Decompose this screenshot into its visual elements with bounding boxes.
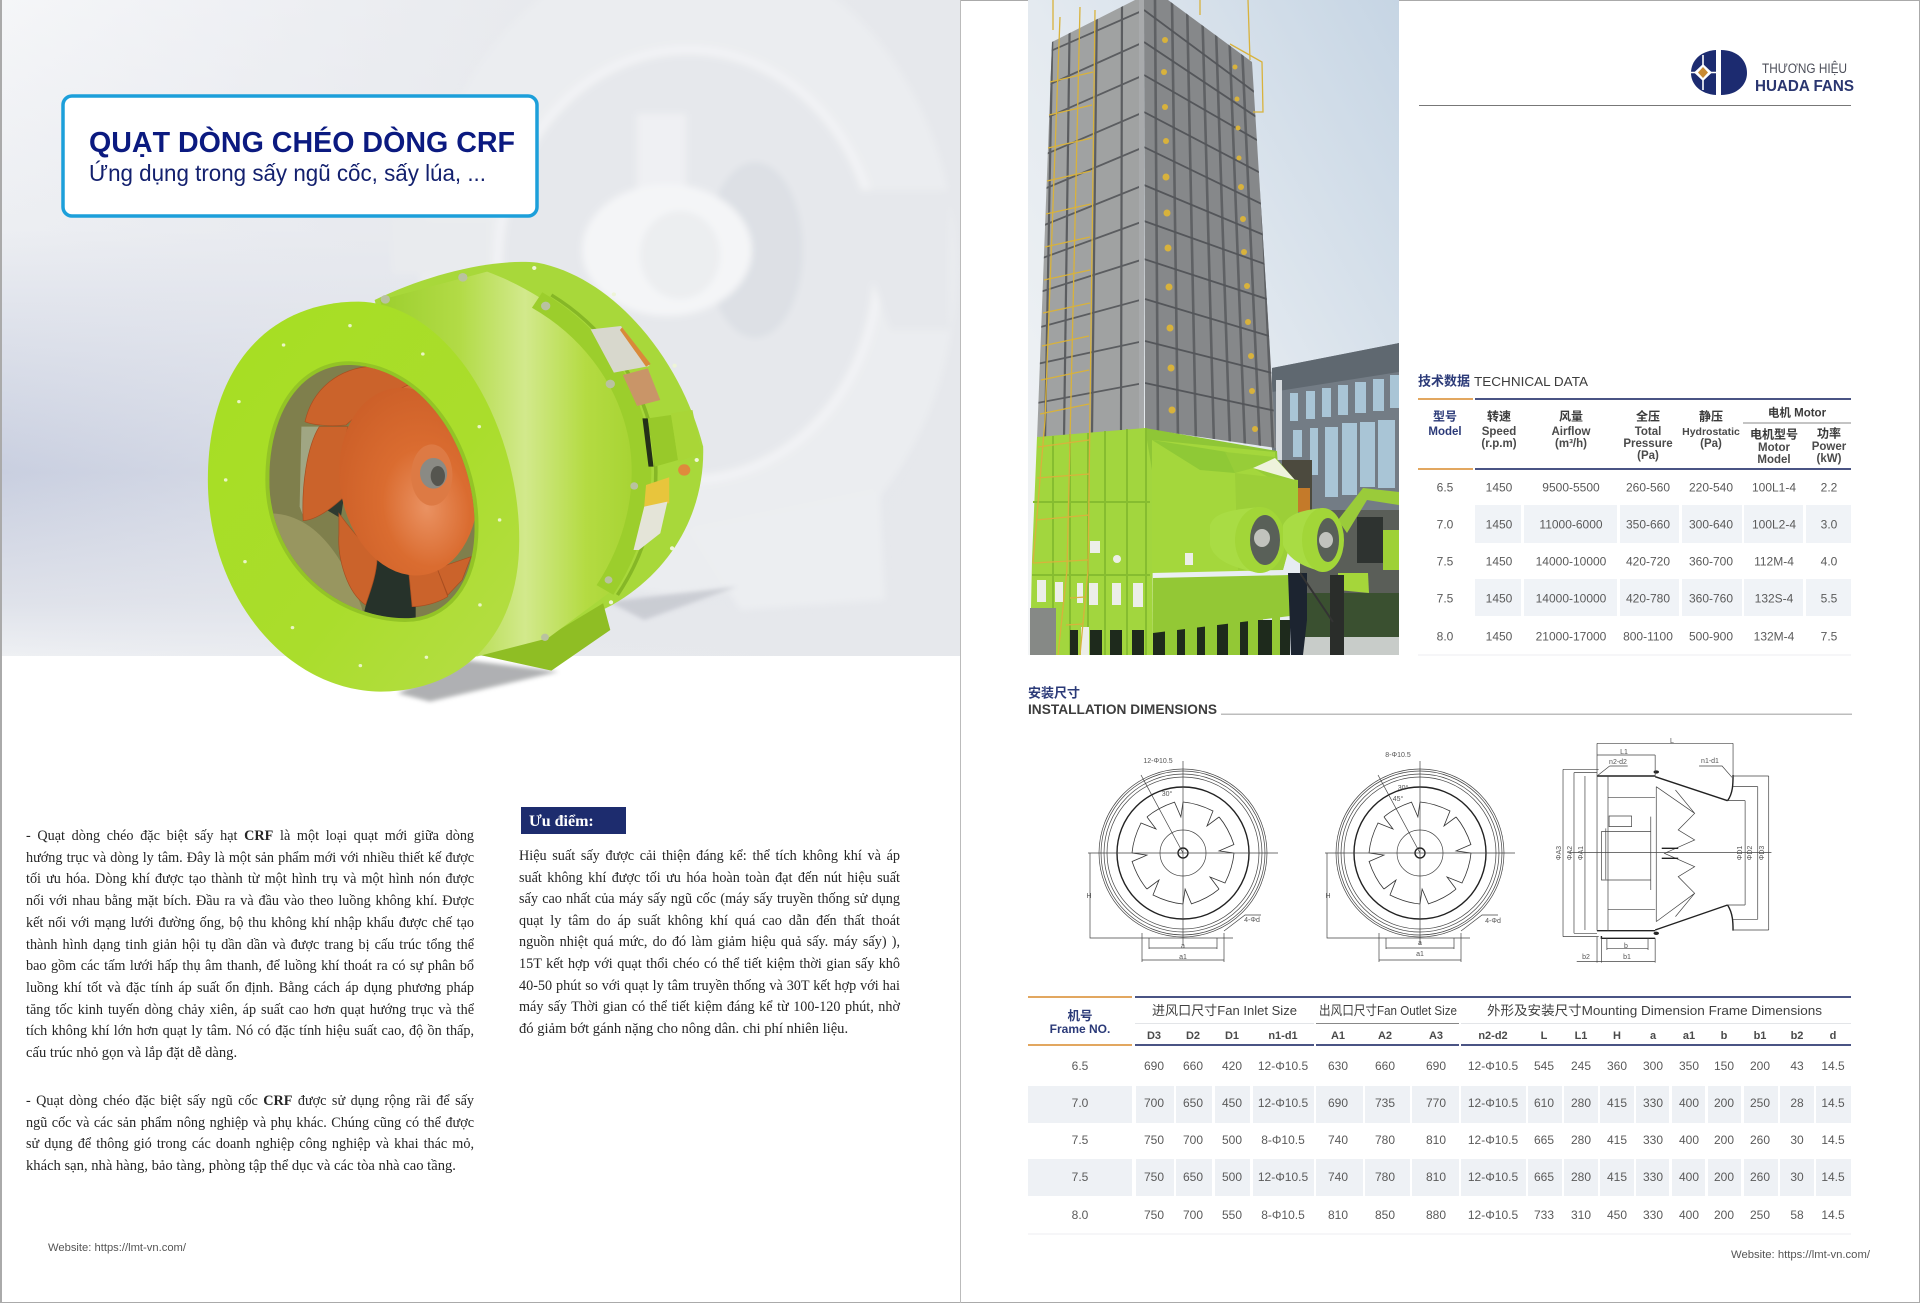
table rows: 200 (1750, 1059, 1770, 1073)
table rows: 100L2-4 (1752, 518, 1796, 532)
text block: advantages: nguồn nhiệt quá mức, do đó làm giảm hiệu quả sấy. máy sấy) ), (519, 934, 900, 950)
text block: product description: cấu trúc nhỏ gọn và lắp đặt dễ dàng. (26, 1045, 237, 1061)
diagram: outlet front view: 4-Φd (1485, 918, 1501, 925)
table header: Total (1635, 426, 1661, 438)
table header: n1-d1 (1268, 1030, 1298, 1042)
table rows: 3.0 (1821, 518, 1838, 532)
table rows: 400 (1679, 1208, 1699, 1222)
table rows: 9500-5500 (1542, 480, 1600, 494)
diagram: inlet front view: H (1086, 893, 1092, 900)
table header: 风量 (1559, 410, 1583, 424)
table rows: 770 (1426, 1096, 1446, 1110)
diagram: inlet front view: a1 (1179, 954, 1187, 961)
table rows: 300 (1643, 1059, 1663, 1073)
table header: 外形及安装尺寸Mounting Dimension Frame Dimensions (1487, 1003, 1823, 1018)
table rows: 6.5 (1072, 1059, 1089, 1073)
table rows: 7.0 (1072, 1096, 1089, 1110)
text block: advantages: máy sấy Thời gian có thể tiết kiệm đáng kể từ 100-120 phút, nhờ (519, 999, 900, 1015)
table rows: 660 (1375, 1059, 1395, 1073)
table rows: 14000-10000 (1536, 592, 1607, 606)
ghosted fan backdrop (494, 48, 878, 490)
logo: Huada Fans brand: HUADA FANS (1755, 78, 1854, 95)
table rows: 5.5 (1821, 592, 1838, 606)
table rows: 350-660 (1626, 518, 1670, 532)
table header: 功率 (1817, 426, 1841, 440)
diagram: side view: ΦD1 (1737, 846, 1744, 860)
diagram: outlet front view: a (1418, 940, 1422, 947)
table rows: 14.5 (1821, 1170, 1845, 1184)
table rows: 250 (1750, 1096, 1770, 1110)
text block: product description: nối với nhau bằng mặt bích. Đầu ra và đầu vào theo luồng không khí. Được (26, 893, 474, 909)
table header: Speed (1482, 426, 1516, 438)
table header: D2 (1186, 1030, 1200, 1042)
table header: A2 (1378, 1030, 1392, 1042)
table rows: 310 (1571, 1208, 1591, 1222)
diagram: inlet front view: 30° (1162, 790, 1172, 798)
text block: product description: - Quạt dòng chéo đặc biệt sấy hạt CRF là một loại quạt mới giữa dòng (26, 828, 474, 844)
table rows: 220-540 (1689, 480, 1733, 494)
table header: (Pa) (1637, 450, 1659, 462)
table header: 型号 (1433, 410, 1457, 424)
text block: product applications: sử dụng để thông gió trong các doanh nghiệp công nghiệp và khai thác mỏ, (26, 1136, 474, 1152)
table rows: 132M-4 (1754, 630, 1795, 644)
table rows: 1450 (1486, 592, 1513, 606)
table rows: 30 (1790, 1133, 1804, 1147)
table header (1050, 1003, 1836, 1042)
table rows: 100L1-4 (1752, 480, 1796, 494)
table header: n2-d2 (1478, 1030, 1508, 1042)
text block: product description: kết nối với mạng lưới đường ống, bộ thu không khí nhập khẩu được chế tạo (26, 915, 474, 931)
table rows: 500 (1222, 1170, 1242, 1184)
table header: Hydrostatic (1682, 426, 1740, 438)
table rows: 200 (1714, 1096, 1734, 1110)
diagram: side view: L1 (1620, 749, 1628, 756)
table rows: 200 (1714, 1170, 1734, 1184)
table rows: 6.5 (1437, 480, 1454, 494)
table rows: 400 (1679, 1096, 1699, 1110)
table header: 转速 (1487, 408, 1511, 424)
table rows: 780 (1375, 1133, 1395, 1147)
table rows: 690 (1144, 1059, 1164, 1073)
diagram: inlet front view: a (1181, 943, 1185, 950)
table rows: 550 (1222, 1208, 1242, 1222)
text block: product description: tăng tốc kinh tuyến dòng chảy xiên, áp suất cao hơn quạt hướng trục và thể (26, 1002, 474, 1018)
table rows: 8-Φ10.5 (1261, 1208, 1305, 1222)
hopper (1152, 440, 1298, 573)
table header: L (1541, 1030, 1548, 1042)
table rows: 12-Φ10.5 (1468, 1170, 1518, 1184)
bolts (381, 273, 638, 641)
tower right face (1140, 0, 1280, 450)
table rows (1072, 1059, 1845, 1222)
table rows: 14000-10000 (1536, 554, 1607, 568)
table header: Model (1428, 426, 1462, 438)
table rows: 280 (1571, 1133, 1591, 1147)
diagram: side view: ΦA2 (1567, 846, 1574, 860)
table rows: 12-Φ10.5 (1468, 1208, 1518, 1222)
table rows: 14.5 (1821, 1133, 1845, 1147)
text block: product description (26, 828, 474, 1061)
table header: Motor (1758, 442, 1790, 454)
table rows: 665 (1534, 1133, 1554, 1147)
photo: grain dryer tower (1028, 0, 1399, 655)
table header: 全压 (1636, 408, 1660, 424)
diagram: outlet front view: 30° (1398, 784, 1408, 792)
table rows: 7.5 (1072, 1133, 1089, 1147)
green base (1030, 428, 1153, 655)
table rows: 700 (1183, 1208, 1203, 1222)
heading: advantages: Ưu điểm: (529, 813, 594, 830)
table rows: 750 (1144, 1208, 1164, 1222)
table rows: 450 (1222, 1096, 1242, 1110)
table header: b (1721, 1030, 1728, 1042)
website link: left page: Website: https://lmt-vn.com/ (48, 1242, 187, 1254)
table rows: 14.5 (1821, 1096, 1845, 1110)
diagram: side view: n2-d2 (1609, 759, 1627, 766)
table header: 出风口尺寸Fan Outlet Size (1319, 1003, 1457, 1018)
logo: Huada Fans brand (1691, 50, 1854, 95)
diagram: outlet front view: a1 (1416, 951, 1424, 958)
tower left face (1037, 0, 1144, 437)
heading: installation dimensions: INSTALLATION DIMENSIONS (1028, 702, 1217, 717)
table header: 电机型号 (1750, 426, 1798, 442)
table rows (1437, 480, 1838, 644)
text block: product description: bao gồm các tấm lưới hấp thụ âm thanh, để luồng khí thoát ra có sự phân bổ (26, 958, 474, 974)
diagram: outlet front view: H (1325, 893, 1331, 900)
table rows: 420-780 (1626, 592, 1670, 606)
text block: product description: luồng khí tốt và đặc tính áp suất ổn định. Bằng cách áp dụng phương pháp (26, 980, 474, 996)
table header: A3 (1429, 1030, 1443, 1042)
table rows: 7.5 (1821, 630, 1838, 644)
table rows: 810 (1328, 1208, 1348, 1222)
table rows: 330 (1643, 1208, 1663, 1222)
table rows: 245 (1571, 1059, 1591, 1073)
table rows: 28 (1790, 1096, 1804, 1110)
data labels (591, 326, 701, 550)
table header: (m³/h) (1555, 438, 1587, 450)
impeller disc (342, 388, 474, 576)
table rows: 665 (1534, 1170, 1554, 1184)
table rows: 415 (1607, 1133, 1627, 1147)
text block: product description: tích không khí lớn hơn quạt ly tâm. Nó có đặc tính hiệu suất cao, độ ồn thấp, (26, 1023, 474, 1039)
table rows: 7.5 (1437, 554, 1454, 568)
table header: H (1613, 1030, 1621, 1042)
table header: A1 (1331, 1030, 1345, 1042)
table header: (r.p.m) (1481, 438, 1517, 450)
text block: advantages: 15T kết hợp với quạt thổi chéo có thể tiết kiệm thời gian sấy khô (519, 956, 900, 972)
front flange (208, 302, 519, 692)
table header: 机号 (1067, 1008, 1093, 1023)
table rows: 280 (1571, 1096, 1591, 1110)
table rows: 330 (1643, 1096, 1663, 1110)
fan foot (480, 603, 610, 671)
harvester and hedge (1282, 460, 1399, 655)
table rows: 330 (1643, 1133, 1663, 1147)
fan body (380, 272, 644, 657)
table: technical data (1418, 398, 1851, 656)
text block: advantages: sấy cao nhất của máy sấy ngũ cốc (máy sấy truyền thống sử dụng (519, 891, 900, 907)
table rows: 150 (1714, 1059, 1734, 1073)
table rows: 12-Φ10.5 (1258, 1059, 1308, 1073)
table header: b1 (1754, 1030, 1766, 1042)
table rows: 420 (1222, 1059, 1242, 1073)
diagram: outlet front view: 45° (1393, 795, 1403, 803)
table rows: 700 (1183, 1133, 1203, 1147)
diagram: side view (1556, 738, 1771, 963)
table rows: 112M-4 (1754, 554, 1794, 568)
heading: advantages (521, 807, 626, 834)
table rows: 750 (1144, 1170, 1164, 1184)
table rows: 810 (1426, 1170, 1446, 1184)
table header: a (1650, 1030, 1657, 1042)
table rows: 14.5 (1821, 1059, 1845, 1073)
heading: technical data: 技术数据 (1418, 374, 1470, 388)
text block: product description: hướng trục và dòng ly tâm. Đây là một sản phẩm mới với nhiều thiết kế được (26, 850, 474, 866)
diagram: side view: ΦD3 (1759, 846, 1766, 860)
table rows: 780 (1375, 1170, 1395, 1184)
table header: Power (1812, 441, 1847, 453)
icon: logo mark (1691, 50, 1747, 95)
table rows: 330 (1643, 1170, 1663, 1184)
text block: product applications (26, 1093, 474, 1174)
text block: advantages: đó giảm bớt gánh nặng cho nông dân. chi phí nhiên liệu. (519, 1021, 848, 1037)
table rows: 630 (1328, 1059, 1348, 1073)
title: QUẠT DÒNG CHÉO DÒNG CRF (89, 125, 515, 159)
brand text: THƯƠNG HIỆU (1762, 61, 1847, 76)
rear flange (375, 262, 703, 643)
dryer legs (1070, 615, 1290, 655)
diagram: side view: ΦA3 (1556, 846, 1563, 860)
table rows: 7.0 (1437, 518, 1454, 532)
heading: installation dimensions: 安装尺寸 (1028, 686, 1080, 700)
table header: L1 (1575, 1030, 1587, 1042)
diagram: inlet front view (1086, 758, 1278, 962)
table rows: 2.2 (1821, 480, 1838, 494)
text block: product applications: - Quạt dòng chéo đặc biệt sấy ngũ cốc CRF được sử dụng rộng rãi để sấy (26, 1093, 474, 1109)
table rows: 43 (1790, 1059, 1804, 1073)
table header: b2 (1791, 1030, 1803, 1042)
text block: product description: thành hình dạng tinh giản hội tụ dần dần và được trang bị cấu trúc tổng thể (26, 937, 474, 953)
text block: advantages: Hiệu suất sấy được cải thiện đáng kể: thể tích không khí và áp (519, 848, 900, 864)
table header: 进风口尺寸Fan Inlet Size (1152, 1003, 1297, 1018)
status lamps (1161, 37, 1258, 432)
text block: advantages: quạt ly tâm do áp suất không khí quá cao dẫn đến thất thoát (519, 913, 900, 929)
warning labels (1037, 541, 1193, 655)
diagram: inlet front view: 12-Φ10.5 (1143, 758, 1173, 765)
table header: D3 (1147, 1030, 1161, 1042)
diagram: side view: b2 (1582, 954, 1590, 961)
table header: Pressure (1623, 438, 1673, 450)
heading: technical data: TECHNICAL DATA (1474, 374, 1588, 389)
table rows: 300-640 (1689, 518, 1733, 532)
table rows: 880 (1426, 1208, 1446, 1222)
panel: title box (63, 96, 537, 216)
table rows: 1450 (1486, 554, 1513, 568)
table rows: 750 (1144, 1133, 1164, 1147)
diagram: side view: n1-d1 (1701, 758, 1719, 765)
diagram: outlet front view (1325, 752, 1515, 962)
table rows: 8-Φ10.5 (1261, 1133, 1305, 1147)
table rows: 810 (1426, 1133, 1446, 1147)
table rows: 500-900 (1689, 630, 1733, 644)
table rows: 200 (1714, 1208, 1734, 1222)
fan shadow (398, 660, 559, 702)
table rows: 690 (1426, 1059, 1446, 1073)
table rows: 260 (1750, 1170, 1770, 1184)
table header: (kW) (1817, 453, 1842, 465)
worker and post (1288, 573, 1344, 655)
table rows: 400 (1679, 1133, 1699, 1147)
table rows: 360-760 (1689, 592, 1733, 606)
table rows: 250 (1750, 1208, 1770, 1222)
table header: Model (1757, 454, 1791, 466)
table rows: 30 (1790, 1170, 1804, 1184)
table rows: 690 (1328, 1096, 1348, 1110)
illustration: green CRF fan (208, 262, 737, 702)
table rows: 260 (1750, 1133, 1770, 1147)
table rows: 58 (1790, 1208, 1804, 1222)
table rows: 800-1100 (1623, 630, 1673, 644)
table rows: 200 (1714, 1133, 1734, 1147)
diagram: inlet front view: 4-Φd (1244, 917, 1260, 924)
table rows: 450 (1607, 1208, 1627, 1222)
table rows: 280 (1571, 1170, 1591, 1184)
table rows: 420-720 (1626, 554, 1670, 568)
table rows: 545 (1534, 1059, 1554, 1073)
table header: (Pa) (1700, 438, 1722, 450)
table header: Frame NO. (1050, 1022, 1110, 1036)
diagram: side view: ΦD2 (1747, 846, 1754, 860)
table rows: 415 (1607, 1096, 1627, 1110)
table rows: 7.5 (1072, 1170, 1089, 1184)
table header (1428, 406, 1847, 466)
table rows: 850 (1375, 1208, 1395, 1222)
table rows: 7.5 (1437, 592, 1454, 606)
text block: advantages: suất không khí được tối ưu hóa hoàn toàn đạt đến nút hiệu suất (519, 870, 900, 886)
table rows: 11000-6000 (1539, 518, 1603, 532)
subtitle: Ứng dụng trong sấy ngũ cốc, sấy lúa, ... (89, 160, 486, 186)
diagram: side view: b (1624, 943, 1628, 950)
table rows: 610 (1534, 1096, 1554, 1110)
table rows: 14.5 (1821, 1208, 1845, 1222)
diagram: side view: b1 (1623, 954, 1631, 961)
table rows: 260-560 (1626, 480, 1670, 494)
table header: 电机 Motor (1768, 406, 1827, 420)
text block: advantages (519, 848, 900, 1037)
table: dimensions (1028, 996, 1851, 1234)
table rows: 4.0 (1821, 554, 1838, 568)
dryer fans (1236, 508, 1344, 573)
table rows: 12-Φ10.5 (1258, 1096, 1308, 1110)
table header: Airflow (1552, 426, 1591, 438)
table rows: 740 (1328, 1133, 1348, 1147)
text block: advantages: 40-50 phút so với quạt ly tâm truyền thống và 30T kết hợp với hai (519, 978, 900, 994)
fan opening and impeller (269, 365, 474, 618)
text block: product applications: khách sạn, nhà hàng, bảo tàng, phòng tập thể dục và các tòa nhà cao tầng. (26, 1158, 456, 1174)
diagram: side view: ΦA1 (1578, 846, 1585, 860)
diagram: side view: L (1670, 738, 1674, 745)
table rows: 650 (1183, 1096, 1203, 1110)
table rows: 8.0 (1072, 1208, 1089, 1222)
table rows: 735 (1375, 1096, 1395, 1110)
impeller blades (303, 366, 471, 607)
table header: 静压 (1699, 408, 1723, 424)
table rows: 650 (1183, 1170, 1203, 1184)
text block: product description: tối ưu hóa. Dòng khí được tạo thành từ một hình trụ và một hình nón được (26, 871, 474, 887)
table rows: 8.0 (1437, 630, 1454, 644)
table rows: 1450 (1486, 480, 1513, 494)
heading: installation dimensions (1028, 686, 1852, 717)
panel: product banner background (2, 0, 960, 656)
website link: right page: Website: https://lmt-vn.com/ (1731, 1249, 1871, 1261)
ladders (1033, 0, 1263, 655)
table rows: 12-Φ10.5 (1258, 1170, 1308, 1184)
text block: product applications: ngũ cốc và các sản phẩm nông nghiệp và phụ khác. Chúng cũng có thể được (26, 1115, 474, 1131)
table rows: 12-Φ10.5 (1468, 1133, 1518, 1147)
table header: d (1830, 1030, 1836, 1042)
table rows: 700 (1144, 1096, 1164, 1110)
table rows: 400 (1679, 1170, 1699, 1184)
building (1272, 343, 1399, 520)
table header: a1 (1683, 1030, 1695, 1042)
heading: technical data (1418, 374, 1588, 389)
table rows: 740 (1328, 1170, 1348, 1184)
table rows: 132S-4 (1755, 592, 1794, 606)
table header: D1 (1225, 1030, 1239, 1042)
table rows: 360 (1607, 1059, 1627, 1073)
table rows: 12-Φ10.5 (1468, 1096, 1518, 1110)
table rows: 733 (1534, 1208, 1554, 1222)
table rows: 350 (1679, 1059, 1699, 1073)
table rows: 1450 (1486, 630, 1513, 644)
table rows: 360-700 (1689, 554, 1733, 568)
table rows: 660 (1183, 1059, 1203, 1073)
diagram: outlet front view: 8-Φ10.5 (1385, 752, 1411, 759)
table rows: 12-Φ10.5 (1468, 1059, 1518, 1073)
table rows: 1450 (1486, 518, 1513, 532)
table rows: 415 (1607, 1170, 1627, 1184)
table rows: 500 (1222, 1133, 1242, 1147)
table rows: 21000-17000 (1536, 630, 1607, 644)
